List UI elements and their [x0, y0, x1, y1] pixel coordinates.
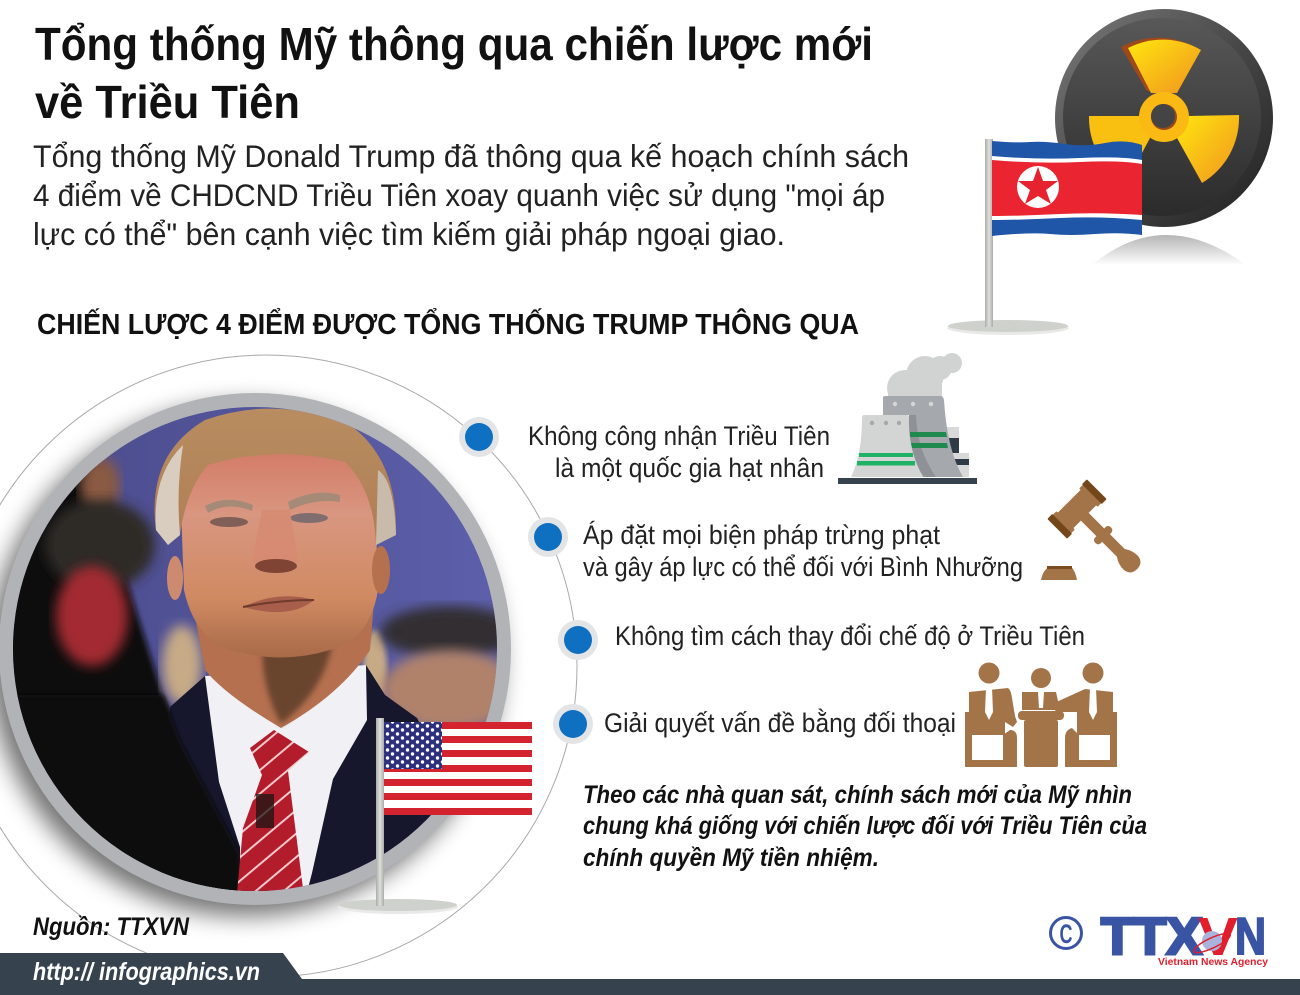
title: về Triều Tiên: [35, 76, 300, 128]
logo: TTXVN: C: [1060, 919, 1072, 949]
icon: nuclear plant: [838, 353, 977, 484]
icon: radiation disc: [1055, 9, 1273, 265]
observers note: [583, 781, 1147, 872]
point 1 text: [528, 421, 830, 483]
observers note: chính quyền Mỹ tiền nhiệm.: [583, 844, 879, 872]
title: [35, 18, 873, 128]
logo: TTXVN: TTX: [1101, 908, 1202, 966]
point 1 text: Không công nhận Triều Tiên: [528, 421, 830, 451]
point 2 text: Áp đặt mọi biện pháp trừng phạt: [583, 520, 941, 550]
icon: gavel: [1041, 479, 1157, 589]
intro text: Tổng thống Mỹ Donald Trump đã thông qua kế hoạch chính sách: [33, 138, 909, 174]
section heading: CHIẾN LƯỢC 4 ĐIỂM ĐƯỢC TỔNG THỐNG TRUMP THÔNG QUA: [37, 307, 859, 341]
intro text: [33, 138, 909, 252]
icon: people in dialogue: [965, 662, 1117, 767]
bullet 4: [553, 704, 593, 744]
source: Nguồn: TTXVN: [33, 913, 190, 941]
title: Tổng thống Mỹ thông qua chiến lược mới: [35, 18, 873, 70]
point 2 text: [583, 520, 1023, 582]
observers note: Theo các nhà quan sát, chính sách mới của Mỹ nhìn: [583, 781, 1132, 809]
footer bar: http:// infographics.vn: [33, 958, 260, 986]
icon: US flag: [338, 718, 532, 914]
point 2 text: và gây áp lực có thể đối với Bình Nhưỡng: [583, 552, 1023, 582]
bullet 3: [558, 620, 598, 660]
logo: TTXVN: [1050, 907, 1268, 968]
icon: North Korea flag: [947, 139, 1142, 335]
point 3 text: Không tìm cách thay đổi chế độ ở Triều Tiên: [615, 621, 1085, 651]
intro text: lực có thể" bên cạnh việc tìm kiếm giải pháp ngoại giao.: [33, 216, 785, 252]
footer bar: [0, 953, 1300, 995]
observers note: chung khá giống với chiến lược đối với Triều Tiên của: [583, 812, 1147, 840]
bullet 1: [459, 417, 499, 457]
bullet 2: [528, 517, 568, 557]
point 1 text: là một quốc gia hạt nhân: [555, 453, 824, 483]
intro text: 4 điểm về CHDCND Triều Tiên xoay quanh việc sử dụng "mọi áp: [33, 177, 885, 213]
portrait photo: [0, 393, 520, 916]
logo: TTXVN: Vietnam News Agency: [1158, 956, 1268, 968]
logo: TTXVN: N: [1235, 908, 1266, 966]
logo: TTXVN: V: [1198, 907, 1238, 967]
orbit circle: [0, 355, 577, 977]
point 4 text: Giải quyết vấn đề bằng đối thoại: [604, 708, 956, 738]
